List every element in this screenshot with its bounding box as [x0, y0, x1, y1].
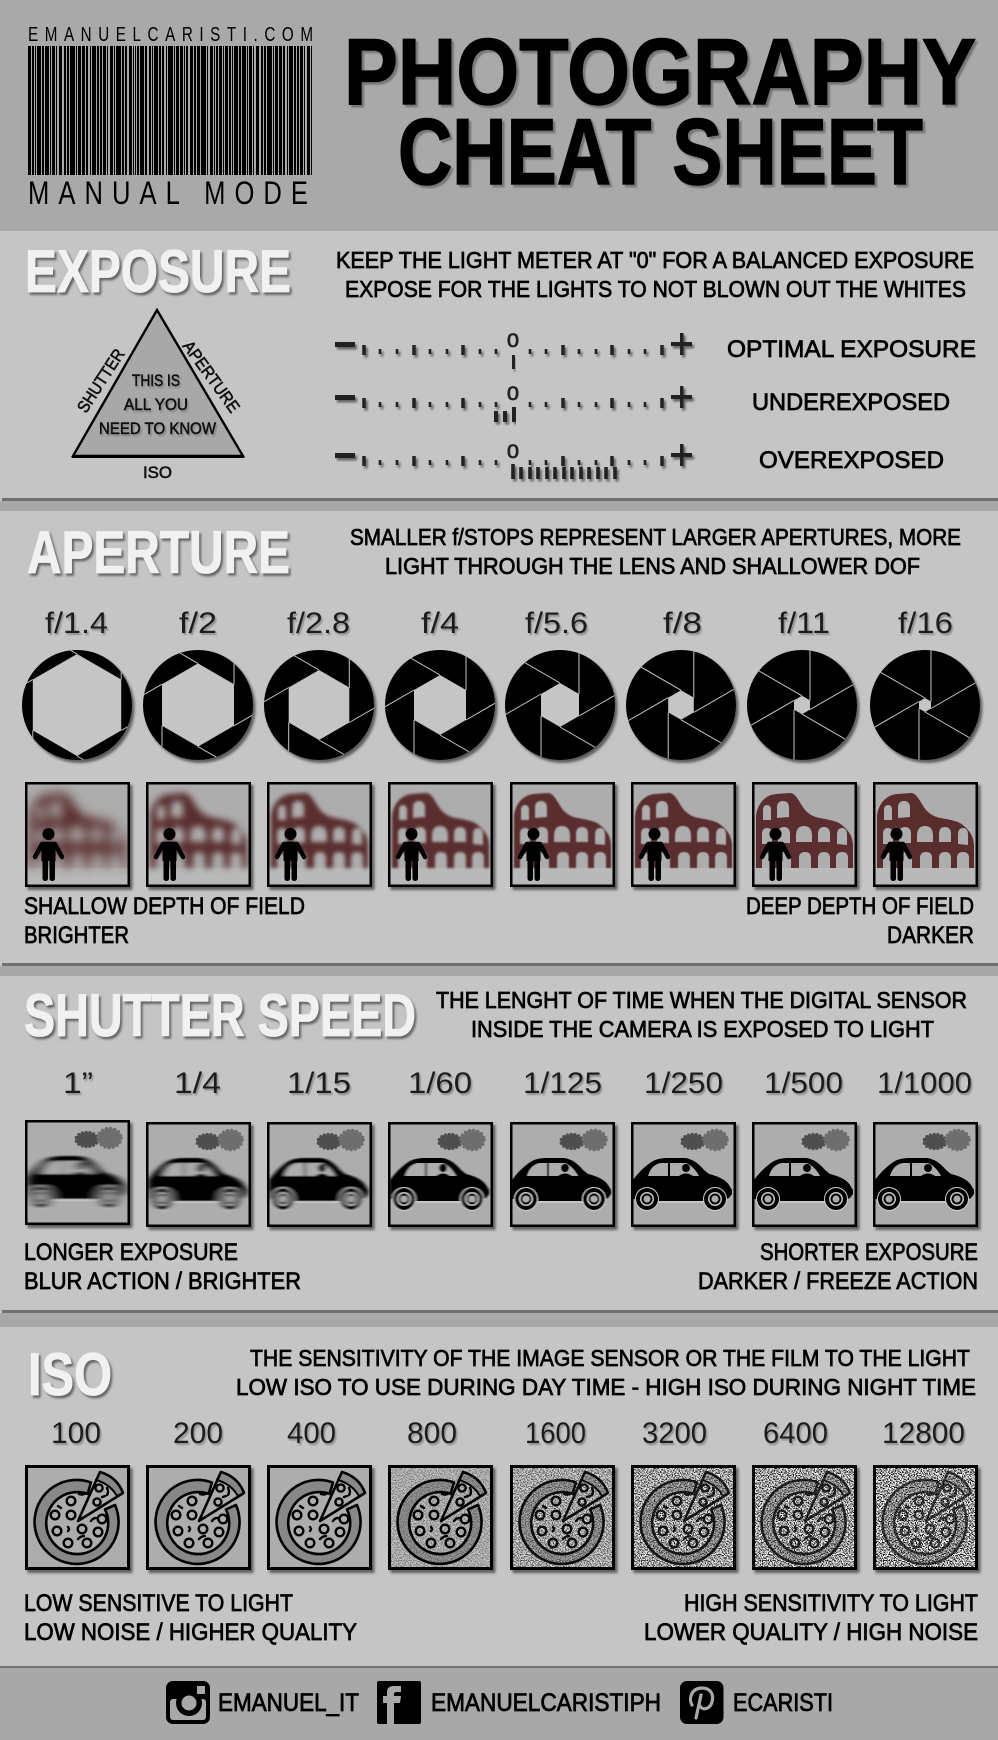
f-stop labels: f/11 — [778, 607, 830, 640]
exposure triangle: SHUTTER — [73, 345, 129, 416]
shutter speed labels: 1/125 — [523, 1067, 602, 1100]
iso description: LOW ISO TO USE DURING DAY TIME - HIGH ISO DURING NIGHT TIME — [236, 1374, 976, 1400]
f-stop labels: f/2.8 — [287, 607, 350, 640]
icon: facebook — [377, 1681, 421, 1724]
exposure description: KEEP THE LIGHT METER AT "0" FOR A BALANCED EXPOSURE — [336, 247, 974, 273]
depth of field photo: f/1.4 — [25, 782, 130, 887]
shutter speed labels — [63, 1067, 972, 1100]
depth of field photo: f/8 — [631, 782, 736, 887]
pizza photo: iso 6400 — [752, 1465, 857, 1570]
facebook handle: EMANUELCARISTIPH — [431, 1689, 661, 1717]
heading: exposure: EXPOSURE — [25, 238, 291, 305]
caption: low sensitivity: LOW NOISE / HIGHER QUALITY — [24, 1619, 357, 1646]
f-stop labels: f/16 — [898, 607, 953, 640]
depth of field photo: f/2.8 — [267, 782, 372, 887]
caption: low sensitivity — [24, 1590, 357, 1646]
pizza photo: iso 1600 — [510, 1465, 615, 1570]
depth of field photo: f/5.6 — [510, 782, 615, 887]
iso labels: 400 — [287, 1417, 336, 1450]
title — [344, 19, 976, 204]
shutter speed description: THE LENGHT OF TIME WHEN THE DIGITAL SENSOR — [436, 987, 967, 1013]
shutter speed labels: 1/500 — [764, 1067, 843, 1100]
exposure triangle — [72, 310, 244, 482]
caption: longer exposure — [24, 1239, 301, 1295]
heading: shutter speed: SHUTTER SPEED — [24, 982, 416, 1049]
exposure triangle: THIS IS — [132, 371, 180, 390]
aperture iris: f/2.8 — [264, 650, 378, 764]
aperture iris: f/8 — [626, 650, 740, 764]
iso labels: 6400 — [763, 1417, 828, 1450]
car photo: 1/250 — [631, 1122, 736, 1227]
shutter speed description — [436, 987, 967, 1042]
light meter: underexposed: 0 — [507, 384, 519, 405]
iso labels: 1600 — [525, 1417, 586, 1450]
instagram handle: EMANUEL_IT — [218, 1689, 359, 1717]
f-stop labels: f/2 — [179, 607, 217, 640]
exposure triangle: ALL YOU — [124, 395, 188, 414]
caption: deep depth of field: DARKER — [887, 922, 974, 949]
f-stop labels: f/4 — [421, 607, 459, 640]
icon: instagram — [166, 1681, 210, 1724]
exposure triangle: ISO — [143, 463, 172, 482]
caption: longer exposure: LONGER EXPOSURE — [24, 1239, 238, 1266]
depth of field photo: f/16 — [873, 782, 978, 887]
heading: iso: ISO — [28, 1341, 112, 1408]
car photo: 1/4 — [146, 1122, 251, 1227]
shutter speed labels: 1” — [63, 1067, 93, 1100]
pizza photo: iso 100 — [25, 1465, 130, 1570]
panel: iso — [0, 1327, 998, 1666]
panel: footer — [0, 1666, 998, 1740]
light meter: overexposed — [335, 442, 944, 479]
car photo: 1 second — [25, 1120, 130, 1225]
caption: high sensitivity — [644, 1590, 978, 1646]
depth of field photo: f/2 — [146, 782, 251, 887]
pizza photo: iso 3200 — [631, 1465, 736, 1570]
aperture iris: f/11 — [747, 650, 861, 764]
caption: shallow depth of field: SHALLOW DEPTH OF FIELD — [24, 893, 305, 920]
car photo: 1/1000 — [873, 1122, 978, 1227]
barcode logo: EMANUELCARISTI.COM — [28, 23, 313, 46]
panel: shutter speed — [25, 992, 982, 1290]
pizza photo: iso 800 — [388, 1465, 493, 1570]
shutter speed labels: 1/250 — [644, 1067, 723, 1100]
light meter: overexposed: 0 — [507, 442, 519, 463]
icon: pinterest — [680, 1681, 724, 1724]
panel: exposure — [0, 231, 998, 498]
aperture iris: f/5.6 — [505, 650, 619, 764]
aperture description: LIGHT THROUGH THE LENS AND SHALLOWER DOF — [385, 553, 920, 579]
caption: shallow depth of field — [24, 893, 305, 949]
exposure triangle: APERTURE — [179, 337, 244, 416]
shutter speed labels: 1/15 — [287, 1067, 351, 1100]
caption: high sensitivity: LOWER QUALITY / HIGH NOISE — [644, 1619, 978, 1646]
pinterest handle: ECARISTI — [733, 1689, 833, 1717]
iso labels: 12800 — [882, 1417, 965, 1450]
iso labels: 200 — [173, 1417, 223, 1450]
aperture description — [350, 524, 961, 579]
iso description — [236, 1345, 976, 1400]
depth of field photo: f/11 — [752, 782, 857, 887]
panel: aperture — [22, 528, 984, 944]
car photo: 1/15 — [267, 1122, 372, 1227]
caption: shorter exposure — [698, 1239, 978, 1295]
shutter speed labels: 1/4 — [174, 1067, 221, 1100]
light meter: underexposed — [335, 384, 950, 422]
f-stop labels: f/5.6 — [525, 607, 588, 640]
exposure description — [336, 247, 974, 302]
iso labels — [51, 1417, 965, 1450]
caption: longer exposure: BLUR ACTION / BRIGHTER — [24, 1268, 301, 1295]
barcode logo: MANUAL MODE — [28, 176, 308, 212]
iso labels: 800 — [407, 1417, 457, 1450]
heading: aperture: APERTURE — [27, 519, 290, 586]
car photo: 1/500 — [752, 1122, 857, 1227]
pizza photo: iso 400 — [267, 1465, 372, 1570]
panel: header — [0, 0, 998, 231]
shutter speed labels: 1/1000 — [877, 1067, 972, 1100]
shutter speed labels: 1/60 — [408, 1067, 472, 1100]
aperture iris: f/16 — [870, 650, 984, 764]
caption: deep depth of field — [746, 893, 974, 949]
exposure triangle: NEED TO KNOW — [99, 419, 216, 438]
car photo: 1/125 — [510, 1122, 615, 1227]
caption: low sensitivity: LOW SENSITIVE TO LIGHT — [24, 1590, 293, 1617]
aperture iris: f/2 — [143, 650, 257, 764]
light meter: overexposed: OVEREXPOSED — [759, 447, 944, 474]
f-stop labels: f/1.4 — [45, 607, 108, 640]
f-stop labels — [45, 607, 953, 640]
pizza photo: iso 200 — [146, 1465, 251, 1570]
shutter speed description: INSIDE THE CAMERA IS EXPOSED TO LIGHT — [471, 1016, 934, 1042]
car photo: 1/60 — [388, 1122, 493, 1227]
depth of field photo: f/4 — [388, 782, 493, 887]
caption: shallow depth of field: BRIGHTER — [24, 922, 129, 949]
barcode logo — [28, 23, 313, 212]
light meter: optimal exposure: 0 — [507, 331, 519, 352]
light meter: optimal exposure — [335, 331, 976, 369]
light meter: underexposed: UNDEREXPOSED — [752, 389, 950, 416]
light meter: optimal exposure: OPTIMAL EXPOSURE — [727, 336, 976, 363]
iso labels: 100 — [51, 1417, 101, 1450]
aperture iris: f/1.4 — [22, 650, 136, 764]
iso labels: 3200 — [642, 1417, 707, 1450]
f-stop labels: f/8 — [663, 607, 702, 640]
aperture iris: f/4 — [385, 650, 499, 764]
pizza photo: iso 12800 — [873, 1465, 978, 1570]
